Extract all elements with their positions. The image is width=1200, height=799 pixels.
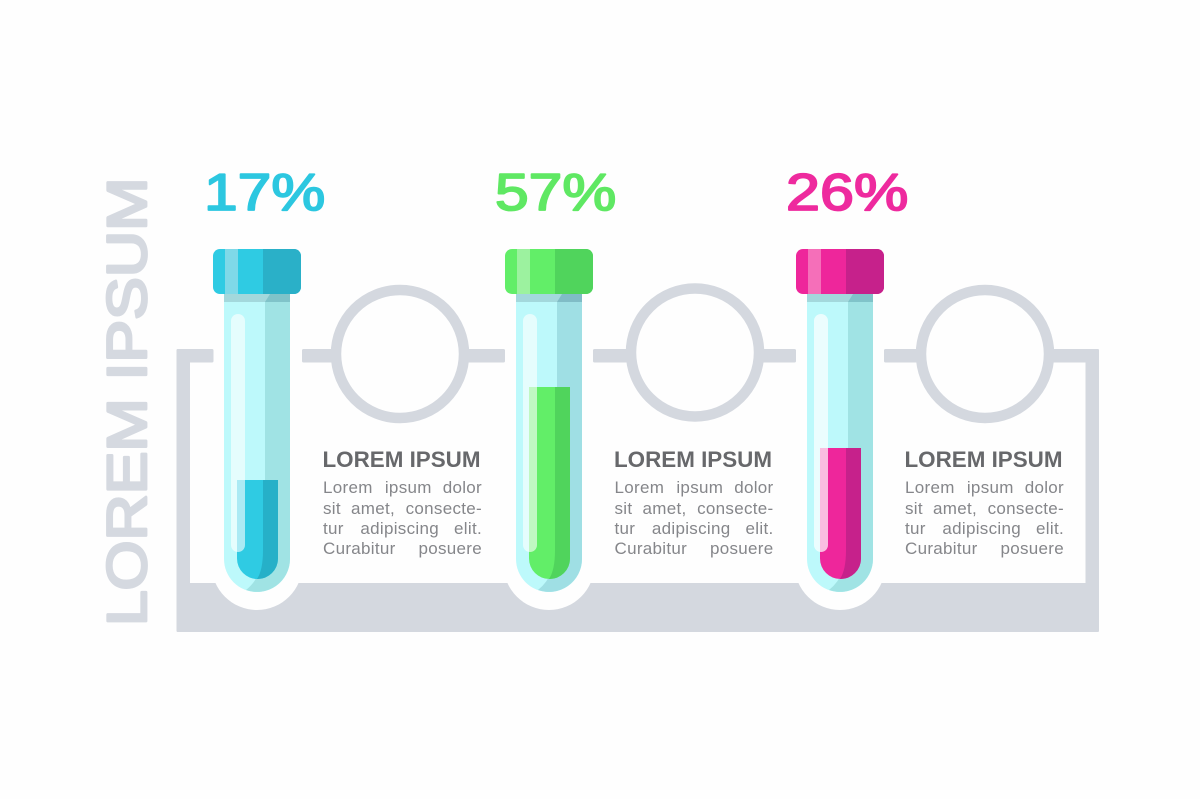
text block 2: elit. <box>746 519 774 538</box>
text block 1: Curabitur <box>323 539 396 558</box>
text block 1: consecte- <box>406 499 482 518</box>
text block 1: dolor <box>443 478 482 497</box>
text block 1: sit <box>323 499 341 518</box>
text block 2: sit <box>614 499 632 518</box>
percentage 17%: 17% <box>204 163 325 221</box>
text block 1 <box>322 447 482 558</box>
empty circle 1 <box>336 290 464 418</box>
text block 1: amet, <box>351 499 395 518</box>
text block 1: ipsum <box>385 478 432 497</box>
text block 2 <box>614 447 774 558</box>
test tube: blue <box>213 249 301 592</box>
text block 3: amet, <box>933 499 977 518</box>
text block 2: posuere <box>710 539 774 558</box>
text block 3 <box>904 447 1064 558</box>
text block 3: posuere <box>1000 539 1064 558</box>
text block 2: ipsum <box>676 478 723 497</box>
text block 3: dolor <box>1025 478 1064 497</box>
text block 3: Curabitur <box>905 539 978 558</box>
empty circle 3 <box>921 290 1049 418</box>
text block 2: consecte- <box>697 499 774 518</box>
text block 2: Lorem <box>614 478 664 497</box>
text block 3: Lorem <box>905 478 955 497</box>
text block 1: elit. <box>454 519 482 538</box>
text block 2: adipiscing <box>652 519 731 538</box>
empty circle 2 <box>631 288 759 416</box>
text block 3: adipiscing <box>942 519 1021 538</box>
text block 3: sit <box>905 499 923 518</box>
text block 3: elit. <box>1036 519 1064 538</box>
text block 1: tur <box>323 519 344 538</box>
rack frame <box>176 349 1099 632</box>
test tube: pink <box>796 249 884 592</box>
text block 1: posuere <box>418 539 482 558</box>
text block 3: ipsum <box>967 478 1014 497</box>
text block 3: LOREM IPSUM <box>904 447 1062 472</box>
text block 1: LOREM IPSUM <box>322 447 480 472</box>
text block 3: consecte- <box>988 499 1064 518</box>
text block 2: dolor <box>734 478 774 497</box>
text block 3: tur <box>905 519 926 538</box>
text block 1: adipiscing <box>360 519 439 538</box>
percentage 57%: 57% <box>495 163 616 221</box>
test tube: green <box>505 249 593 592</box>
text block 2: tur <box>614 519 635 538</box>
rotated title: LOREM IPSUM <box>96 178 158 626</box>
text block 2: Curabitur <box>614 539 687 558</box>
text block 1: Lorem <box>323 478 373 497</box>
text block 2: LOREM IPSUM <box>614 447 772 472</box>
text block 2: amet, <box>642 499 687 518</box>
percentage 26%: 26% <box>786 164 908 222</box>
